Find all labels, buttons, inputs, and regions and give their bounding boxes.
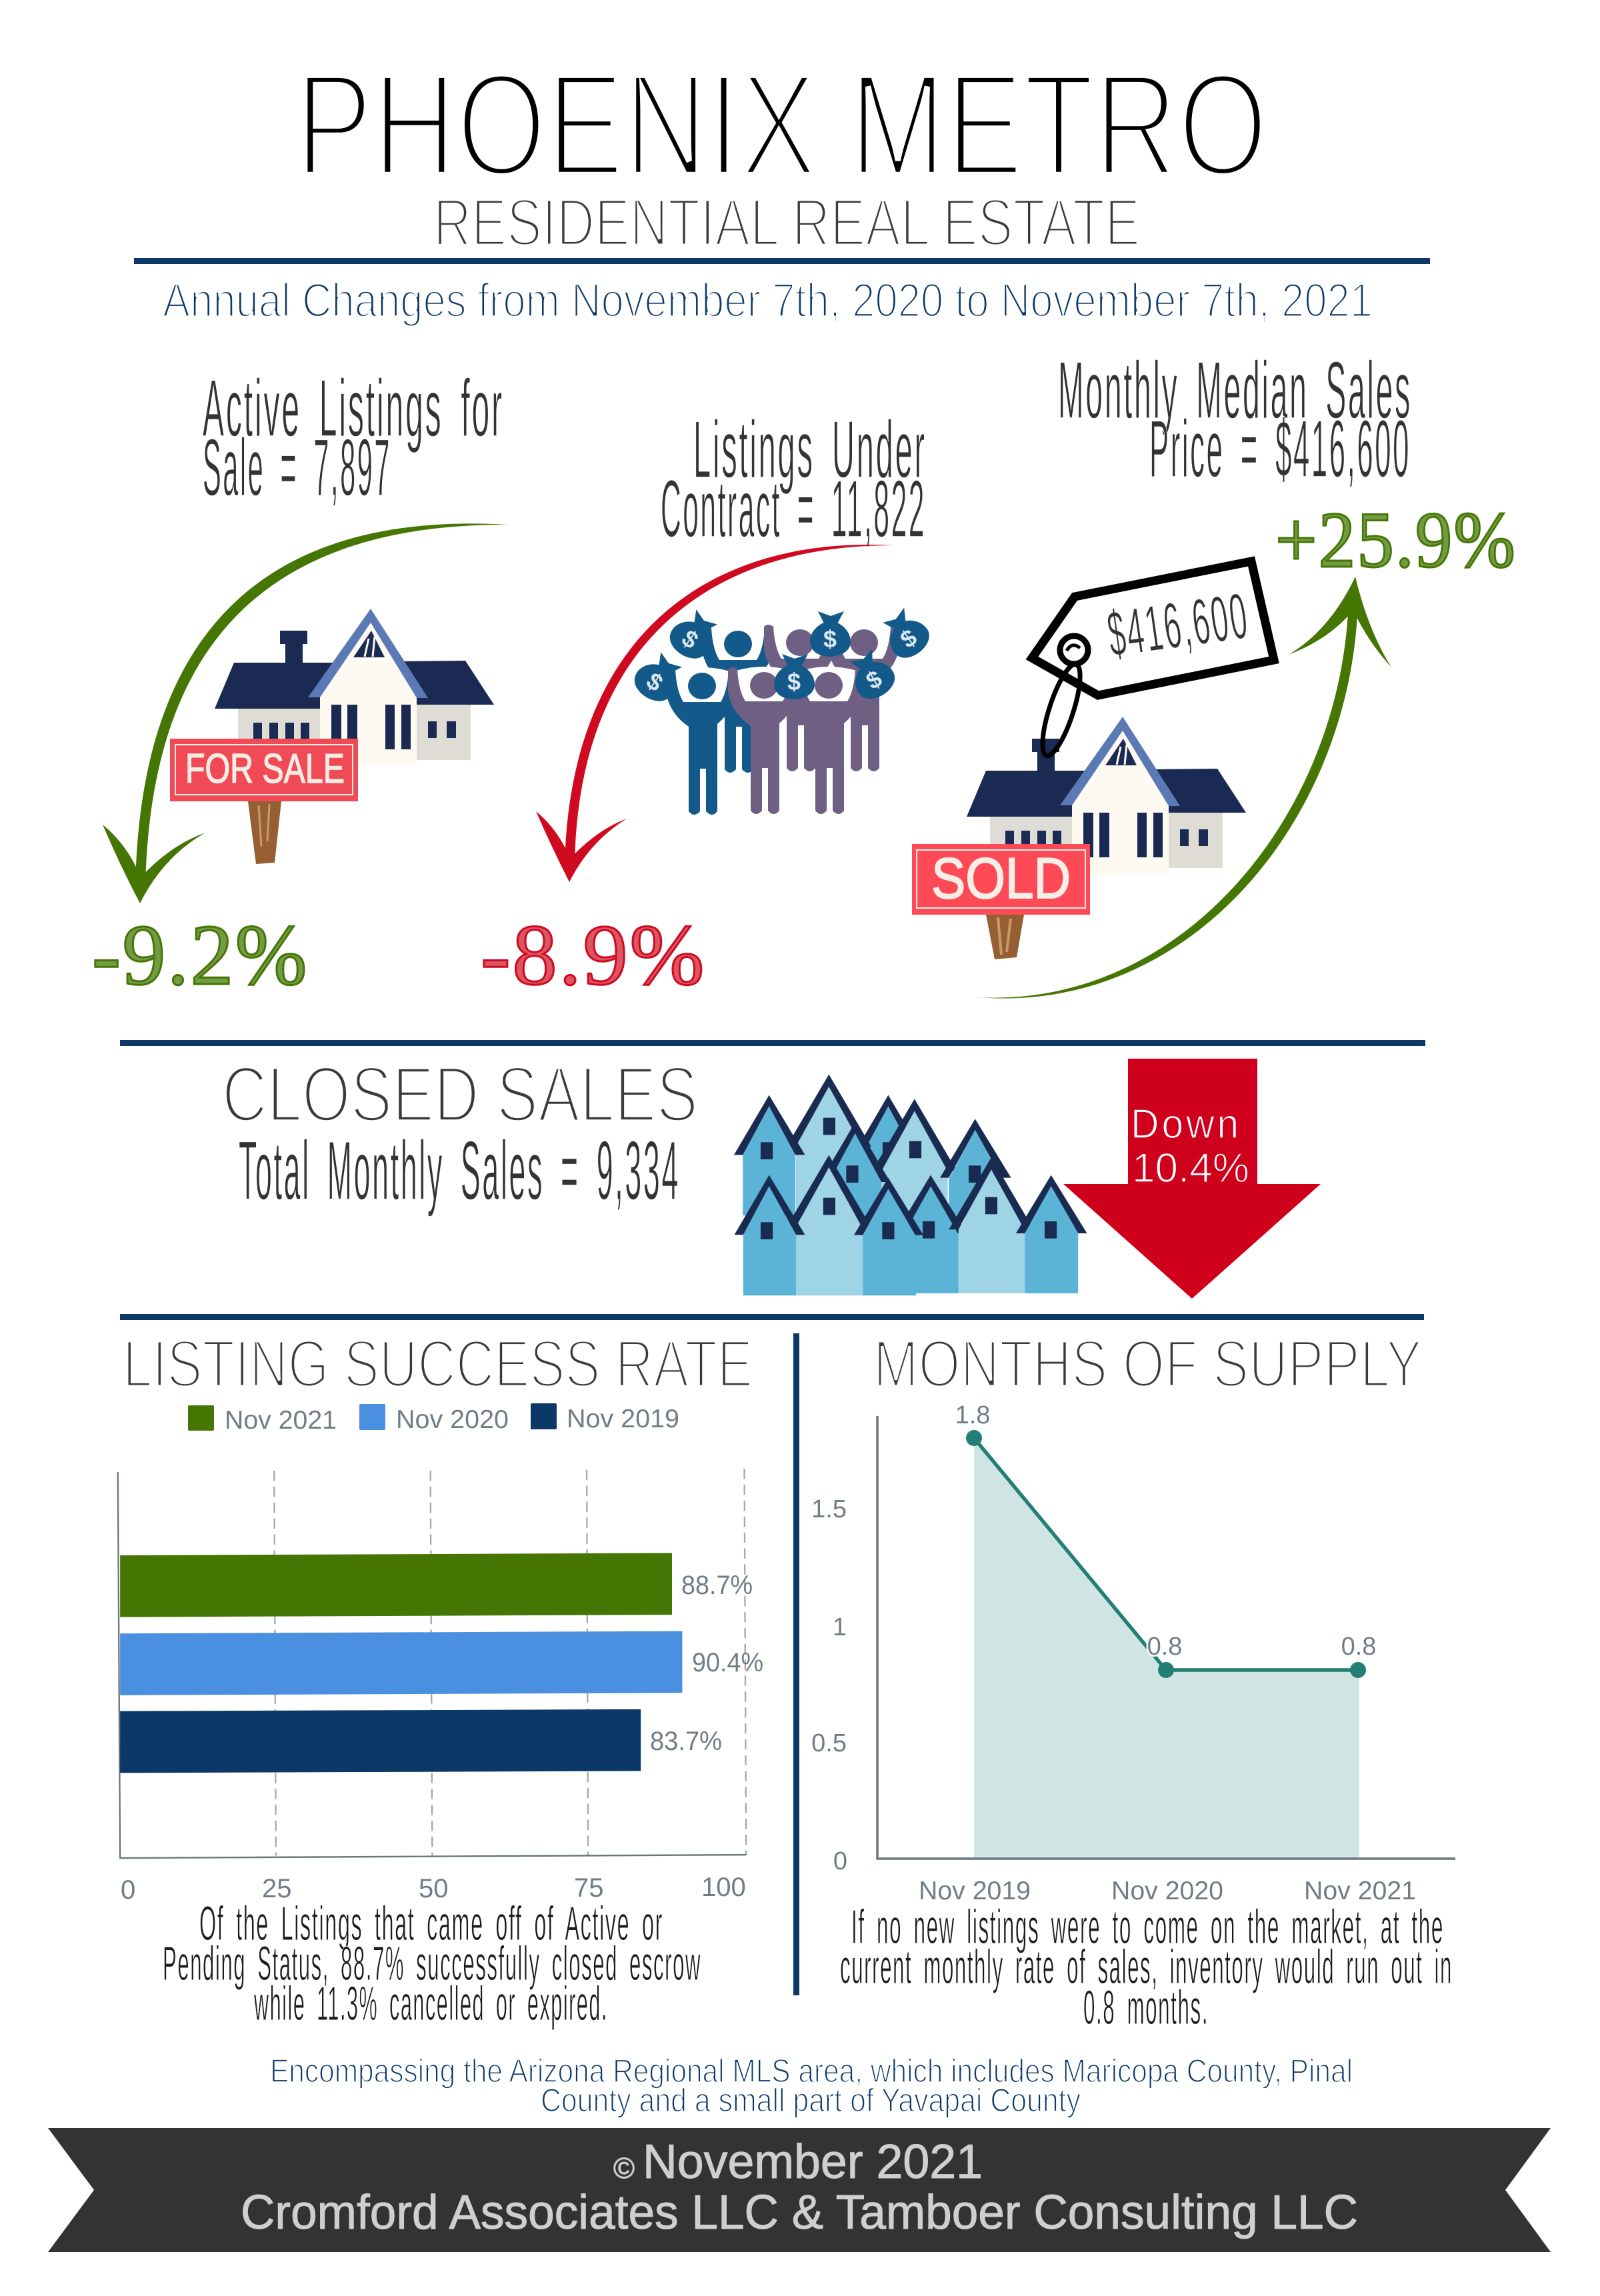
area chart: 1 bbox=[833, 1613, 847, 1641]
area chart: 1.8 bbox=[955, 1401, 990, 1429]
icon: people holding money bags: $ bbox=[787, 668, 801, 695]
panel: listing success rate bbox=[118, 1327, 763, 2031]
area chart: 0.8 bbox=[1147, 1633, 1182, 1661]
icon: price tag bbox=[1032, 561, 1274, 759]
icon: people holding money bags: $ bbox=[823, 625, 837, 653]
icon: cluster of houses bbox=[734, 1075, 1087, 1295]
legend: Nov 2021 bbox=[225, 1406, 337, 1435]
sold sign: SOLD bbox=[931, 847, 1071, 911]
bar chart: 90.4% bbox=[692, 1648, 763, 1677]
area chart: Nov 2019 bbox=[919, 1877, 1031, 1905]
panel: closed sales bbox=[222, 1051, 1321, 1299]
section rule bbox=[120, 1040, 1425, 1046]
months of supply caption bbox=[840, 1901, 1453, 2035]
area chart bbox=[811, 1401, 1455, 1905]
for sale sign: FOR SALE bbox=[185, 746, 345, 792]
panel: listings under contract bbox=[481, 404, 935, 1003]
legend: Nov 2020 bbox=[396, 1405, 509, 1434]
arrow: red down bbox=[536, 545, 894, 882]
text: Listings Under bbox=[693, 404, 927, 495]
icon: people holding money bags bbox=[629, 604, 935, 815]
arrow: green down bbox=[103, 523, 508, 903]
change: -8.9%: -8.9% bbox=[481, 907, 706, 1003]
title: PHOENIX METRO bbox=[295, 43, 1268, 207]
active listings label: Sale = 7,897 bbox=[203, 422, 391, 513]
for sale sign bbox=[170, 739, 358, 801]
active listings label bbox=[203, 363, 504, 513]
bar chart: 75 bbox=[574, 1873, 604, 1903]
area chart: Nov 2021 bbox=[1304, 1877, 1416, 1905]
listing success caption bbox=[163, 1897, 701, 2031]
date range line: Annual Changes from November 7th, 2020 to November 7th, 2021 bbox=[163, 275, 1373, 327]
bar chart: 100 bbox=[701, 1873, 746, 1902]
legend bbox=[188, 1403, 679, 1435]
bar chart: 0 bbox=[121, 1875, 135, 1905]
coverage note: Encompassing the Arizona Regional MLS area, which includes Maricopa County, Pinal bbox=[270, 2053, 1353, 2089]
area chart: Nov 2020 bbox=[1111, 1877, 1223, 1905]
panel: months of supply bbox=[811, 1327, 1455, 2035]
under contract label bbox=[661, 404, 927, 554]
icon: people holding money bags: $ bbox=[895, 623, 922, 653]
icon: people holding money bags: $ bbox=[641, 667, 668, 697]
area chart: 0.8 bbox=[1341, 1633, 1376, 1661]
closed sales heading: CLOSED SALES bbox=[222, 1051, 698, 1139]
copyright date: © bbox=[613, 2152, 635, 2185]
area chart: 1.5 bbox=[811, 1495, 847, 1523]
arrow: green up bbox=[977, 577, 1391, 999]
company names: Cromford Associates LLC & Tamboer Consulting LLC bbox=[241, 2186, 1358, 2239]
coverage note bbox=[270, 2053, 1353, 2119]
text: Active Listings for bbox=[203, 363, 504, 453]
text: Pending Status, 88.7% successfully closed escrow bbox=[163, 1937, 701, 1991]
panel: active listings bbox=[92, 363, 508, 1003]
area chart: 0.5 bbox=[811, 1729, 847, 1757]
change: -9.2%: -9.2% bbox=[92, 907, 309, 1003]
bar chart bbox=[118, 1469, 763, 1905]
icon: price tag: $416,600 bbox=[1103, 579, 1253, 671]
coverage note: County and a small part of Yavapai County bbox=[541, 2083, 1081, 2119]
panel: closed sales: Total Monthly Sales = 9,334 bbox=[239, 1125, 680, 1217]
bar chart: 50 bbox=[419, 1874, 448, 1903]
arrow: big red down with text: Down bbox=[1131, 1101, 1241, 1147]
for sale post bbox=[248, 801, 281, 864]
icon: house for sale bbox=[170, 609, 494, 864]
panel: listing success rate: Of the Listings that came off of Active or bbox=[199, 1897, 663, 1951]
icon: house sold bbox=[912, 717, 1246, 959]
copyright date: November 2021 bbox=[643, 2135, 983, 2189]
listing success caption: while 11.3% cancelled or expired. bbox=[254, 1977, 608, 2031]
months of supply heading: MONTHS OF SUPPLY bbox=[873, 1327, 1422, 1401]
arrow: big red down with text: 10.4% bbox=[1132, 1145, 1249, 1191]
panel: median sales price bbox=[912, 345, 1517, 999]
text: Contract = 11,822 bbox=[661, 463, 926, 554]
vertical divider bbox=[793, 1333, 799, 1995]
section rule bbox=[120, 1314, 1424, 1320]
median price label bbox=[1058, 345, 1412, 494]
footer ribbon bbox=[48, 2128, 1551, 2252]
bar chart: 83.7% bbox=[650, 1727, 722, 1756]
area chart: 0 bbox=[833, 1847, 847, 1875]
sold post bbox=[986, 915, 1024, 959]
subtitle: RESIDENTIAL REAL ESTATE bbox=[433, 185, 1140, 260]
legend: Nov 2019 bbox=[567, 1405, 679, 1433]
bar chart: 88.7% bbox=[681, 1571, 753, 1600]
listing success heading: LISTING SUCCESS RATE bbox=[123, 1327, 753, 1401]
bar chart: 25 bbox=[262, 1874, 292, 1903]
change: +25.9%: +25.9% bbox=[1275, 495, 1517, 584]
icon: people holding money bags: $ bbox=[861, 665, 887, 695]
header rule bbox=[134, 258, 1430, 264]
months of supply caption: 0.8 months. bbox=[1083, 1981, 1209, 2035]
icon: people holding money bags: $ bbox=[677, 624, 703, 654]
arrow: big red down with text bbox=[1063, 1059, 1321, 1299]
